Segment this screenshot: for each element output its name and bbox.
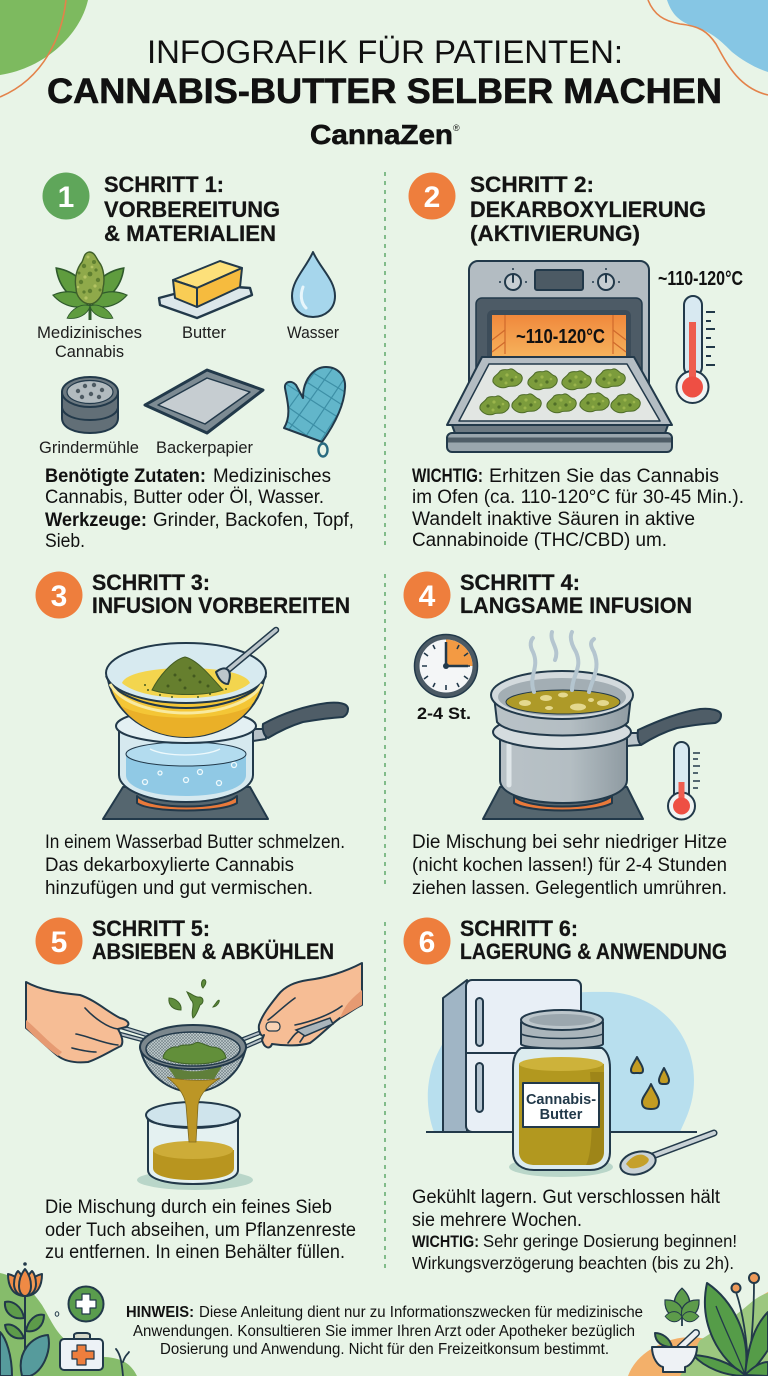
decoration: bottom left plants and medical icons [0,1262,137,1376]
temperature label: ~110-120°C [658,268,743,290]
illustration: fridge, jar and spoon [426,980,714,1178]
step 1 number badge: 1 [58,181,74,214]
step 5 text [45,1197,356,1263]
icon: grinder [62,377,118,433]
footer note: HINWEIS: [126,1304,194,1321]
step 6 heading: SCHRITT 6: [460,916,578,941]
step 3 text [45,832,345,899]
step 1 text: Sieb. [45,531,85,552]
step 1 text: Grinder, Backofen, Topf, [153,510,354,531]
step 3 heading: INFUSION VORBEREITEN [92,593,350,618]
icon: butter [159,261,252,318]
step 1 heading: & MATERIALIEN [104,221,276,246]
title [47,34,722,111]
step 5 heading: ABSIEBEN & ABKÜHLEN [92,939,334,964]
step 6 heading [460,916,727,964]
step 4 number badge [404,572,450,618]
step 6 number badge: 6 [419,926,435,959]
step 2 number badge: 2 [424,181,440,214]
step 3 heading: SCHRITT 3: [92,570,210,595]
tool labels: Backerpapier [156,439,253,457]
logo: CannaZen: CannaZen [310,119,453,150]
step 1 text [45,466,354,552]
step 5 number badge [36,918,82,964]
logo: CannaZen: ® [453,123,460,133]
step 4 heading [460,570,692,618]
icon: low heat thermometer [668,742,700,820]
title: CANNABIS-BUTTER SELBER MACHEN [47,72,722,111]
step 1 heading [104,172,280,246]
step 2 text: Cannabinoide (THC/CBD) um. [412,530,667,551]
step 3 heading [92,570,350,618]
icon: baking tray [145,370,263,433]
panel: step 2 [408,172,744,551]
footer note [126,1304,643,1358]
step 2 heading: SCHRITT 2: [470,172,594,197]
step 2 text: Wandelt inaktive Säuren in aktive [412,509,695,530]
step 2 heading: DEKARBOXYLIERUNG [470,197,706,222]
tool labels: Grindermühle [39,439,139,457]
step 4 number badge: 4 [419,580,436,613]
ingredient labels: Wasser [287,324,339,342]
step 5 number badge: 5 [51,926,67,959]
step 4 heading: LANGSAME INFUSION [460,593,692,618]
icon: thermometer [676,296,715,403]
step 5 text: Die Mischung durch ein feines Sieb [45,1197,332,1218]
step 6 number badge [404,918,450,964]
step 2 text [412,466,744,551]
step 6 text: Wirkungsverzögerung beachten (bis zu 2h). [412,1253,734,1273]
illustration: pot on stove with steam [483,632,721,819]
ingredient labels: Butter [182,324,226,342]
icon: water drop [292,252,335,317]
illustration: oven with tray: ~110-120°C [516,326,605,348]
step 1 text: Cannabis, Butter oder Öl, Wasser. [45,487,324,508]
panel: step 1 [37,172,354,552]
ingredient labels [37,324,339,361]
illustration: fridge, jar and spoon: Butter [540,1107,583,1123]
step 5 heading [92,916,334,964]
clock label: 2-4 St. [417,704,471,723]
decoration: top left blob [0,0,88,97]
step 6 heading: LAGERUNG & ANWENDUNG [460,939,727,964]
step 2 text: WICHTIG: [412,466,483,487]
step 2 text: im Ofen (ca. 110-120°C für 30-45 Min.). [412,487,744,508]
step 1 text: Werkzeuge: [45,510,147,531]
panel: step 5 [26,916,362,1263]
title: INFOGRAFIK FÜR PATIENTEN: [147,34,623,70]
panel: step 6 [404,916,737,1273]
step 2 heading: (AKTIVIERUNG) [470,221,640,246]
step 1 text: Medizinisches [213,466,331,487]
step 2 text: Erhitzen Sie das Cannabis [489,466,719,487]
footer note: Anwendungen. Konsultieren Sie immer Ihren Arzt oder Apotheker bezüglich [133,1323,635,1340]
icon: cannabis bud [50,252,130,322]
step 6 text: Gekühlt lagern. Gut verschlossen hält [412,1187,721,1208]
step 3 text: hinzufügen und gut vermischen. [45,878,313,899]
ingredient labels: Cannabis [55,343,124,361]
step 4 text [412,832,727,899]
step 4 text: (nicht kochen lassen!) für 2-4 Stunden [412,855,727,876]
decoration: top right blob [648,0,768,95]
illustration: hands straining into glass [26,963,362,1190]
icon: oven mitt [283,366,346,458]
step 1 heading: SCHRITT 1: [104,172,224,197]
step 4 heading: SCHRITT 4: [460,570,580,595]
step 6 text: WICHTIG: [412,1232,479,1251]
step 1 text: Benötigte Zutaten: [45,466,206,487]
step 4 text: ziehen lassen. Gelegentlich umrühren. [412,878,727,899]
footer note: Dosierung und Anwendung. Nicht für den Freizeitkonsum bestimmt. [160,1341,609,1358]
step 5 text: zu entfernen. In einen Behälter füllen. [45,1242,345,1263]
step 3 text: In einem Wasserbad Butter schmelzen. [45,832,345,853]
footer note: Diese Anleitung dient nur zu Informationszwecken für medizinische [199,1304,643,1321]
icon: clock [414,634,478,698]
illustration: oven with tray [447,261,672,452]
step 3 number badge [36,572,82,618]
panel: step 3 [36,570,350,899]
step 6 text: Sehr geringe Dosierung beginnen! [483,1231,737,1251]
tool labels [39,439,253,457]
illustration: double boiler with bowl [103,630,348,819]
step 3 text: Das dekarboxylierte Cannabis [45,855,294,876]
panel: step 4 [404,570,727,899]
step 1 heading: VORBEREITUNG [104,197,280,222]
step 5 text: oder Tuch abseihen, um Pflanzenreste [45,1220,356,1241]
step 5 heading: SCHRITT 5: [92,916,210,941]
step 6 text [412,1187,737,1273]
step 2 heading [470,172,706,246]
step 4 text: Die Mischung bei sehr niedriger Hitze [412,832,727,853]
step 6 text: sie mehrere Wochen. [412,1210,582,1231]
decoration: bottom right plants and mortar [628,1273,768,1376]
step 3 number badge: 3 [51,580,67,613]
step 1 number badge [42,172,90,220]
illustration: fridge, jar and spoon: Cannabis- [526,1092,596,1108]
step 2 number badge [408,172,456,220]
ingredient labels: Medizinisches [37,324,142,342]
